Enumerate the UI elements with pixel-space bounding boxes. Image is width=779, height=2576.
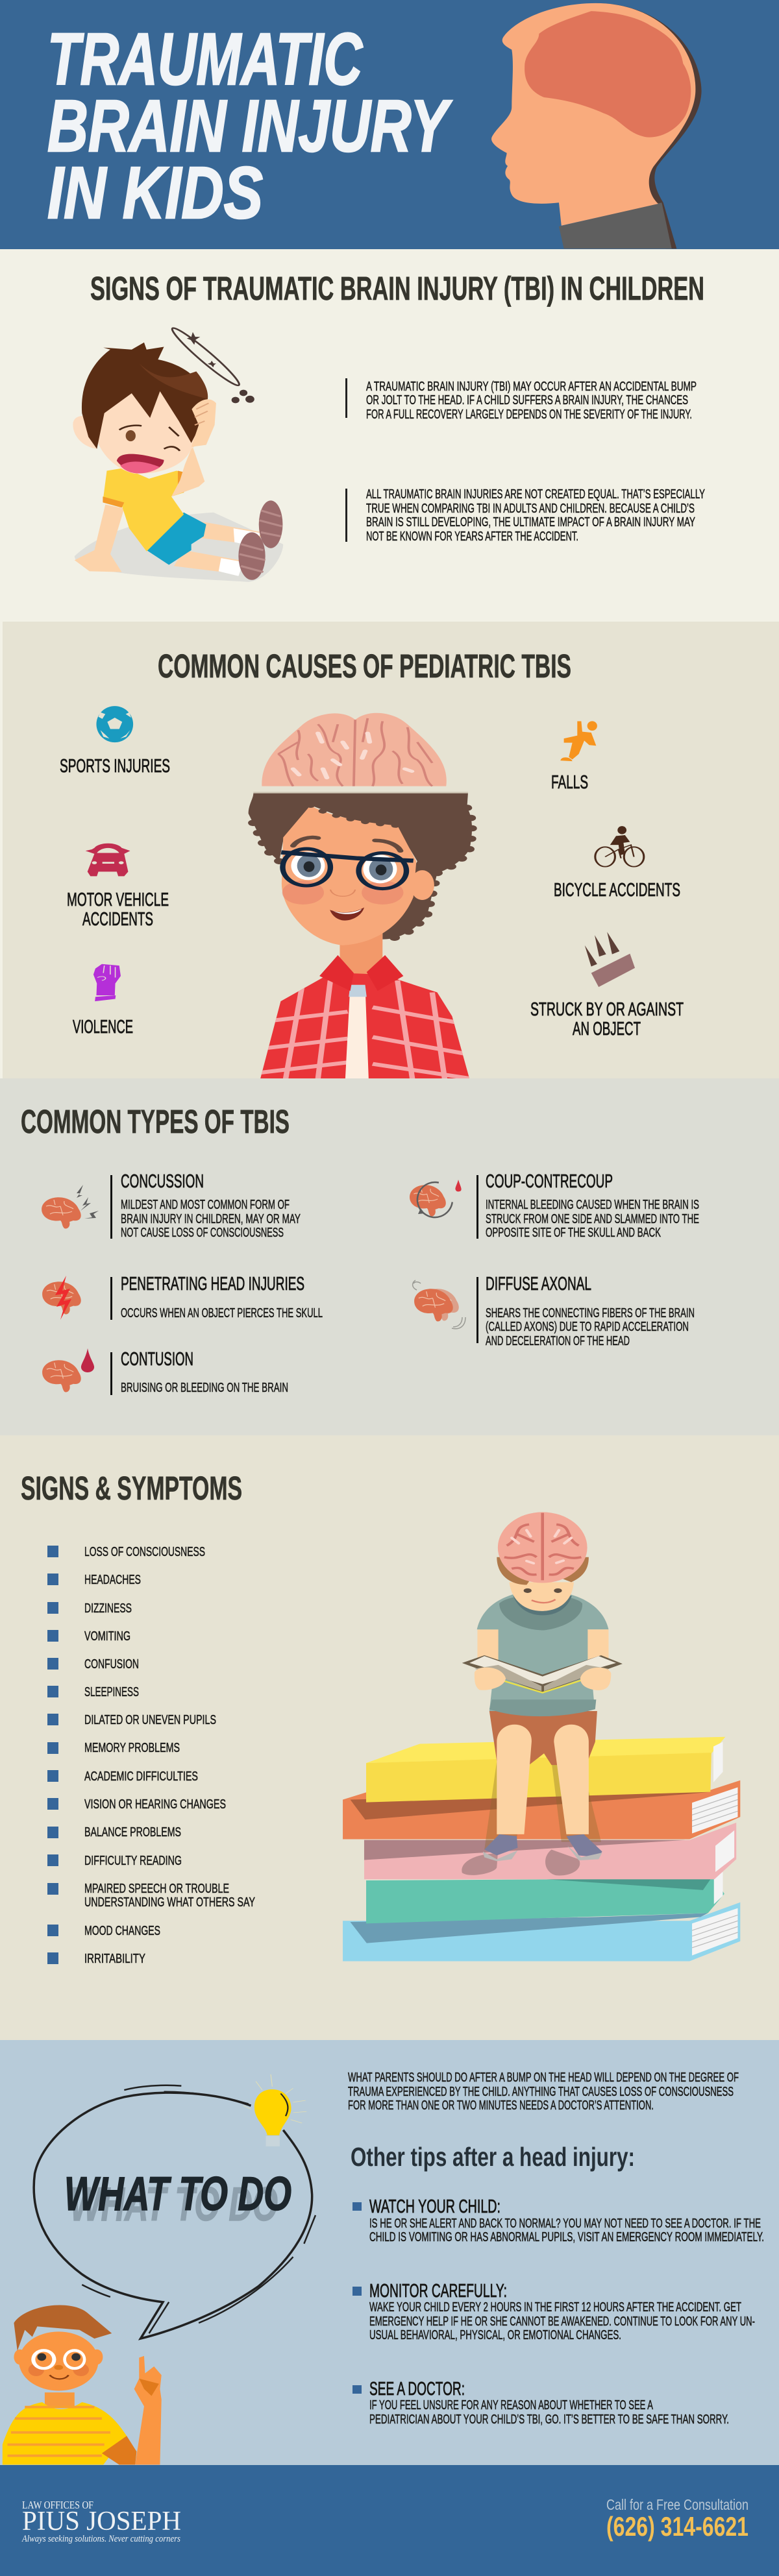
label: what to do: [64, 2168, 291, 2231]
heading: COMMON TYPES OF TBIS: [21, 1103, 290, 1140]
text block: intro 2: [345, 487, 705, 544]
icon: brain with rotation arrow and drop: [410, 1177, 462, 1222]
logo: law offices of Pius Joseph: PIUS JOSEPH: [22, 2507, 181, 2536]
logo: law offices of Pius Joseph: [21, 2499, 181, 2544]
type: penetrating head injuries: OCCURS WHEN AN OBJECT PIERCES THE SKULL: [121, 1306, 323, 1320]
type: concussion: BRAIN INJURY IN CHILDREN, MAY OR MAY: [121, 1212, 301, 1226]
label: struck by or against an object: STRUCK BY OR AGAINST: [530, 999, 684, 1020]
heading: COMMON CAUSES OF PEDIATRIC TBIS: [158, 648, 571, 685]
blue book: [343, 1902, 740, 1962]
symptom list: CONFUSION: [84, 1657, 139, 1671]
call to action: [606, 2496, 748, 2542]
panel: header: [0, 0, 779, 249]
tip: monitor carefully: [352, 2281, 755, 2342]
type: contusion: BRUISING OR BLEEDING ON THE BRAIN: [121, 1381, 288, 1395]
type: coup-contrecoup: COUP-CONTRECOUP: [486, 1171, 613, 1192]
yellow book: [366, 1737, 725, 1803]
symptom list: BALANCE PROBLEMS: [84, 1825, 181, 1840]
illustration: pointing boy: [3, 2305, 162, 2465]
heading: SIGNS & SYMPTOMS: [21, 1470, 242, 1507]
icon: falling person: [560, 721, 597, 761]
pink book: [364, 1823, 736, 1879]
title: IN KIDS: [47, 152, 263, 234]
symptom list: SLEEPINESS: [84, 1685, 139, 1699]
logo: law offices of Pius Joseph: LAW OFFICES OF: [22, 2499, 93, 2511]
symptom list: DILATED OR UNEVEN PUPILS: [84, 1713, 216, 1727]
icon: brain with lightning: [42, 1276, 81, 1320]
tip: watch your child: [352, 2196, 764, 2244]
symptom list: VISION OR HEARING CHANGES: [84, 1797, 226, 1812]
tip: see a doctor: [352, 2379, 729, 2427]
panel: signs and symptoms: [0, 1435, 779, 2040]
type: concussion: CONCUSSION: [121, 1171, 204, 1192]
orange book: [343, 1780, 740, 1840]
type: coup-contrecoup: [410, 1171, 699, 1240]
symptom list: [47, 1545, 255, 1966]
icon: fist: [93, 964, 121, 1001]
icon: light bulb: [243, 2074, 306, 2146]
icon: struck by object: [585, 932, 635, 987]
label: motor vehicle accidents: [67, 890, 169, 930]
type: contusion: CONTUSION: [121, 1349, 193, 1370]
panel: common causes: [0, 622, 684, 1078]
symptom list: LOSS OF CONSCIOUSNESS: [84, 1545, 205, 1559]
speech bubble: [34, 2085, 315, 2339]
tip: monitor carefully: MONITOR CAREFULLY:: [369, 2281, 507, 2302]
label: sports injuries: SPORTS INJURIES: [60, 756, 170, 777]
boy: [462, 1512, 623, 1875]
symptom list: HEADACHES: [84, 1573, 141, 1587]
text block: intro: [348, 2071, 739, 2113]
illustration: head profile with brain: [491, 3, 702, 249]
symptom list: MPAIRED SPEECH OR TROUBLE: [84, 1882, 229, 1896]
symptom list: UNDERSTANDING WHAT OTHERS SAY: [84, 1895, 255, 1910]
label: what to do: WHAT TO DO: [64, 2168, 291, 2220]
illustration: boy reading on stack of books: [343, 1512, 740, 1962]
panel: footer: [0, 2465, 779, 2576]
symptom list: MEMORY PROBLEMS: [84, 1741, 180, 1755]
logo: law offices of Pius Joseph: Always seeking solutions. Never cutting corners: [21, 2534, 180, 2544]
type: concussion: [42, 1171, 301, 1240]
type: contusion: [42, 1348, 288, 1395]
illustration: boy with exposed brain: [249, 713, 472, 1079]
type: diffuse axonal: DIFFUSE AXONAL: [486, 1274, 591, 1294]
symptom list: DIFFICULTY READING: [84, 1854, 182, 1868]
symptom list: ACADEMIC DIFFICULTIES: [84, 1769, 198, 1784]
label: motor vehicle accidents: MOTOR VEHICLE: [67, 890, 169, 910]
type: penetrating head injuries: PENETRATING HEAD INJURIES: [121, 1274, 304, 1294]
panel: what to do: [0, 2040, 779, 2465]
symptom list: VOMITING: [84, 1629, 130, 1644]
icon: brain with sparks: [42, 1185, 99, 1229]
type: diffuse axonal: [413, 1274, 695, 1348]
icon: brain with blood drop: [42, 1348, 94, 1392]
type: concussion: NOT CAUSE LOSS OF CONSCIOUSNESS: [121, 1226, 284, 1240]
panel: common types: [0, 1078, 779, 1435]
title: BRAIN INJURY: [47, 85, 452, 167]
label: struck by or against an object: [530, 999, 684, 1039]
type: diffuse axonal: AND DECELERATION OF THE HEAD: [486, 1334, 630, 1348]
label: what to do: WHAT TO DO: [70, 2178, 278, 2231]
panel: signs of TBI in children: [0, 249, 779, 622]
text block: intro 2: NOT BE KNOWN FOR YEARS AFTER THE ACCIDENT.: [366, 529, 578, 544]
illustration: dizzy boy: [73, 324, 283, 582]
title: TRAUMATIC: [47, 18, 363, 100]
icon: soccer ball: [96, 706, 133, 742]
symptom list: DIZZINESS: [84, 1601, 132, 1616]
label: falls: FALLS: [551, 772, 588, 793]
heading: other tips: Other tips after a head injury:: [351, 2142, 635, 2172]
icon: bicycle: [595, 826, 644, 867]
tip: see a doctor: SEE A DOCTOR:: [369, 2379, 465, 2400]
teal book: [366, 1872, 724, 1923]
label: bicycle accidents: BICYCLE ACCIDENTS: [554, 880, 680, 901]
icon: car: [86, 844, 130, 876]
text block: intro 1: [345, 378, 697, 422]
label: struck by or against an object: AN OBJECT: [573, 1019, 641, 1039]
label: motor vehicle accidents: ACCIDENTS: [82, 909, 153, 930]
symptom list: MOOD CHANGES: [84, 1924, 160, 1938]
type: penetrating head injuries: [42, 1274, 323, 1320]
symptom list: IRRITABILITY: [84, 1952, 145, 1966]
title: [47, 18, 452, 234]
tip: watch your child: WATCH YOUR CHILD:: [369, 2196, 501, 2217]
label: violence: VIOLENCE: [73, 1017, 133, 1038]
type: coup-contrecoup: OPPOSITE SITE OF THE SKULL AND BACK: [486, 1226, 661, 1240]
type: concussion: MILDEST AND MOST COMMON FORM OF: [121, 1198, 290, 1212]
tip: monitor carefully: USUAL BEHAVIORAL, PHYSICAL, OR EMOTIONAL CHANGES.: [369, 2328, 621, 2342]
icon: shaking brain: [413, 1280, 465, 1329]
